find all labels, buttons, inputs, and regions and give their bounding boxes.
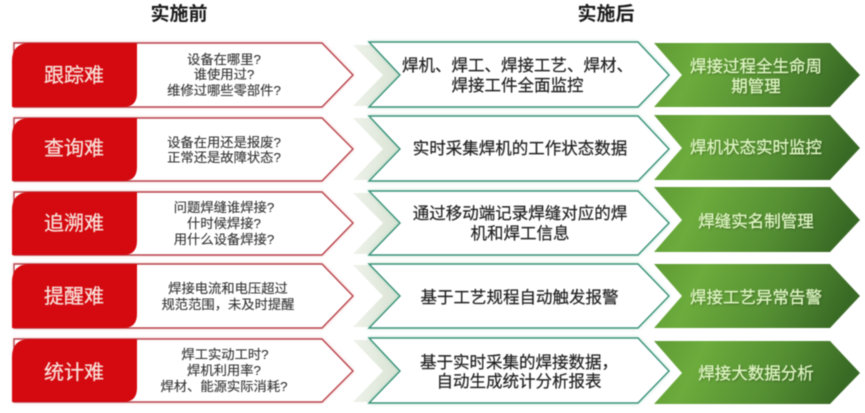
result arrow: lifecycle management [654,43,860,107]
arrow: traceability solution: 通过移动端记录焊缝对应的焊 [413,204,627,223]
before panel: statistics difficulty: 焊材、能源实际消耗? [160,379,288,394]
arrow: lookup solution [353,116,669,181]
row 5: statistics [12,338,860,404]
before panel: statistics difficulty: 统计难 [44,361,104,384]
before panel: traceability difficulty: 什时候焊接? [187,215,261,231]
before panel: tracking difficulty: 设备在哪里? [187,51,261,67]
result arrow: process anomaly alarm [654,264,860,328]
arrow: tracking solution: 焊接工件全面监控 [452,76,584,95]
before panel: tracking difficulty [12,43,353,107]
arrow: alert solution: 基于工艺规程自动触发报警 [420,288,618,307]
before panel: lookup difficulty [12,118,353,181]
arrow: statistics solution: 基于实时采集的焊接数据， [420,353,618,372]
before panel: lookup difficulty: 查询难 [44,137,104,160]
row 2: lookup [12,115,860,181]
arrow: tracking solution: 焊机、焊工、焊接工艺、焊材、 [402,56,633,75]
result arrow: real-name management: 焊缝实名制管理 [698,212,814,231]
before panel: alert difficulty: 规范范围，未及时提醒 [162,297,294,312]
arrow: traceability solution: 机和焊工信息 [470,224,570,243]
before panel: statistics difficulty: 焊机利用率? [187,362,261,378]
heading: before implementation: 实施前 [150,2,208,25]
before panel: alert difficulty: 提醒难 [44,285,104,308]
before panel: tracking difficulty: 谁使用过? [194,66,254,82]
before panel: alert difficulty: 焊接电流和电压超过 [168,280,288,296]
arrow: lookup solution: 实时采集焊机的工作状态数据 [413,139,627,158]
before panel: traceability difficulty [12,192,353,255]
before panel: statistics difficulty [12,339,353,402]
before panel: tracking difficulty: 跟踪难 [44,64,104,87]
result arrow: lifecycle management: 期管理 [731,77,781,96]
arrow: alert solution [353,264,669,328]
heading: after implementation: 实施后 [577,2,635,25]
arrow: tracking solution [353,42,669,107]
before panel: alert difficulty [12,264,353,328]
result arrow: process anomaly alarm: 焊接工艺异常告警 [690,288,822,307]
result arrow: real-time status: 焊机状态实时监控 [690,138,822,157]
before panel: traceability difficulty: 追溯难 [44,212,104,235]
row 3: traceability [12,187,860,255]
before panel: traceability difficulty: 用什么设备焊接? [174,231,274,247]
before panel: statistics difficulty: 焊工实动工时? [181,347,269,362]
before panel: traceability difficulty: 问题焊缝谁焊接? [174,199,274,215]
result arrow: lifecycle management: 焊接过程全生命周 [690,57,822,76]
arrow: traceability solution [353,191,669,255]
before panel: tracking difficulty: 维修过哪些零部件? [167,83,281,98]
before panel: lookup difficulty: 正常还是故障状态? [167,150,281,165]
result arrow: big data analysis: 焊接大数据分析 [698,364,814,383]
arrow: statistics solution [353,338,669,403]
before panel: lookup difficulty: 设备在用还是报废? [167,134,281,150]
result arrow: real-name management [654,187,860,252]
row 4: alerts [12,264,860,328]
result arrow: real-time status [654,115,860,180]
arrow: statistics solution: 自动生成统计分析报表 [436,372,602,391]
result arrow: big data analysis [654,341,860,404]
row 1: tracking [12,42,860,107]
